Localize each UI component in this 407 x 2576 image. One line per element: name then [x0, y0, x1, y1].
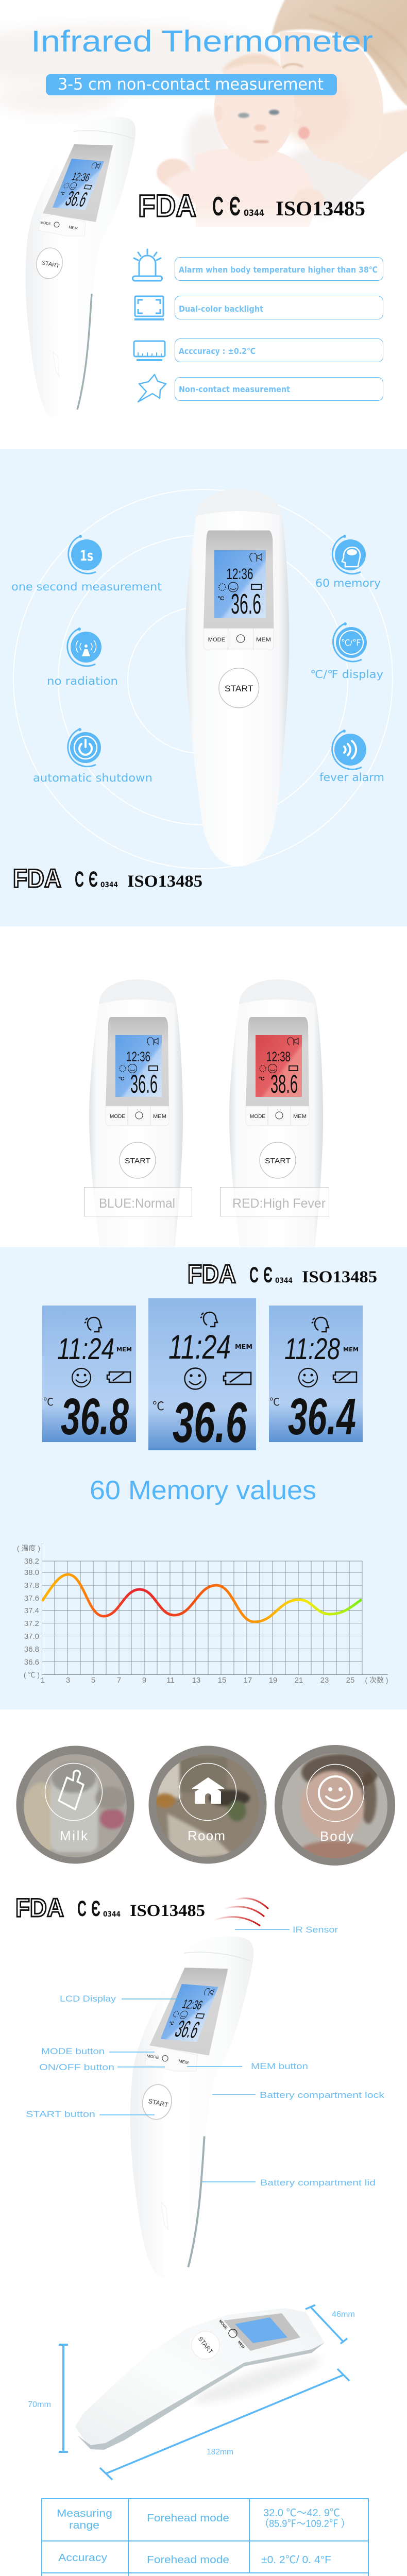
icon: brain in head	[332, 535, 366, 574]
callout: LCD display: LCD Display	[60, 1994, 116, 2004]
front thermometer, large: °C	[218, 596, 224, 602]
label: blue normal: BLUE:Normal	[99, 1196, 175, 1211]
LCD panel 2: 36.6	[148, 1298, 256, 1454]
feature: one second measurement: one second measurement	[11, 581, 162, 593]
line chart: temperature readings: 11	[166, 1676, 175, 1685]
callout: battery compartment lock: Battery compartment lock	[260, 2090, 385, 2100]
row: measuring range: range	[69, 2520, 99, 2531]
feature row: accuracy: Acccuracy : ±0.2℃	[179, 346, 256, 356]
feature row: non-contact	[138, 375, 383, 402]
thermometer with dimensions	[75, 2308, 325, 2450]
icon: house	[192, 1778, 224, 1803]
thermometer: blue backlight: 12:36	[126, 1049, 150, 1064]
baby's head	[214, 53, 295, 161]
panel: hero background photo of mother and baby	[0, 0, 407, 227]
thermometer with part callouts: MEM	[178, 2058, 189, 2065]
certification logos: blue panel: C	[75, 867, 84, 892]
icon: infrared waves	[214, 1898, 268, 1926]
callout: battery compartment lid: Battery compartment lid	[260, 2178, 376, 2188]
feature: C/F display	[310, 622, 383, 681]
certification logos: hero	[138, 189, 365, 223]
row: measuring range: （85.9℉～109.2℉ ）	[260, 2518, 350, 2530]
certification logos: hero: ISO13485	[276, 197, 365, 220]
icon: alarm light	[133, 249, 162, 281]
hero thermometer, tilted: °C	[59, 191, 65, 196]
LCD panel 1: 36.8	[42, 1306, 136, 1446]
feature: automatic shutdown	[33, 728, 152, 784]
specification table	[42, 2499, 368, 2576]
callout: IR sensor: IR Sensor	[293, 1925, 338, 1935]
LCD panel 3: 36.4	[269, 1306, 363, 1446]
use case: room	[148, 1745, 267, 1864]
dimension: width 46mm	[306, 2305, 355, 2344]
baby's fist	[157, 159, 191, 187]
line chart: temperature readings: 7	[117, 1676, 121, 1685]
line chart: temperature readings: 21	[295, 1676, 303, 1685]
feature row: alarm	[133, 249, 383, 281]
certification logos: parts section: C	[77, 1896, 87, 1921]
mother's face	[280, 32, 383, 164]
feature: fever alarm: fever alarm	[319, 771, 384, 784]
line chart: temperature readings: 37.4	[24, 1606, 39, 1615]
hero thermometer, tilted	[26, 117, 135, 420]
feature: no radiation	[47, 628, 118, 687]
feature: one second measurement	[11, 535, 162, 593]
feature: automatic shutdown: automatic shutdown	[33, 772, 152, 784]
feature: 60 memory	[315, 535, 381, 589]
LCD panel 3: 36.4: ℃	[269, 1397, 280, 1408]
label: blue normal	[84, 1187, 192, 1216]
use case: body	[275, 1745, 395, 1866]
thermometer with part callouts: 12:36	[180, 1997, 205, 2013]
title: Infrared Thermometer	[31, 25, 373, 58]
line chart: temperature readings: 37.0	[24, 1632, 39, 1641]
LCD panel 3: 36.4: MEM	[343, 1346, 359, 1353]
line chart: temperature readings: 37.6	[24, 1594, 39, 1603]
certification logos: memory panel: ISO13485	[302, 1268, 377, 1286]
front thermometer, large: MEM	[256, 637, 271, 643]
hero thermometer, tilted: 12:36	[70, 171, 92, 184]
front thermometer, large	[185, 489, 289, 867]
thermometer: blue backlight: MEM	[153, 1114, 166, 1120]
line chart: temperature readings: 36.6	[24, 1658, 39, 1667]
thermometer: blue backlight	[89, 979, 183, 1323]
feature row: accuracy	[134, 339, 383, 362]
line chart: temperature readings: 5	[91, 1676, 95, 1685]
line chart: temperature readings: 13	[192, 1676, 200, 1685]
line chart: temperature readings: 25	[346, 1676, 354, 1685]
row: accuracy: ±0. 2℃/ 0. 4°F	[261, 2554, 331, 2566]
LCD panel 2: 36.6: ℃	[152, 1399, 164, 1413]
feature: C/F display: ℃/℉ display	[310, 668, 383, 681]
thermometer: red backlight: MODE	[250, 1114, 265, 1120]
dimension: height 70mm: 70mm	[28, 2400, 51, 2409]
certification logos: parts section: 0344	[103, 1910, 121, 1919]
dimension: width 46mm: 46mm	[332, 2310, 355, 2319]
front thermometer, large: 12:36	[226, 566, 253, 583]
callout: MEM button: MEM button	[251, 2061, 308, 2071]
panel: features on blue background	[0, 449, 407, 926]
icon: ruler	[134, 341, 165, 360]
LCD panel 1: 36.8: ℃	[43, 1397, 54, 1408]
thermometer: red backlight: 12:38	[266, 1049, 291, 1064]
subtitle pill: 3-5 cm non-contact measurement	[58, 75, 324, 94]
hero thermometer, tilted: START	[41, 260, 60, 269]
icon: unit switch	[333, 622, 367, 662]
LCD panel 3: 36.4: 36.4	[288, 1388, 356, 1446]
row: measuring range: Forehead mode	[147, 2513, 229, 2524]
baby's body	[196, 148, 317, 227]
row: measuring range	[57, 2507, 350, 2531]
certification logos: memory panel: Є	[263, 1263, 273, 1287]
row: accuracy: Forehead mode	[147, 2554, 229, 2566]
line chart: temperature readings: ( 温度 )	[17, 1544, 40, 1552]
callout: ON/OFF button: ON/OFF button	[39, 2062, 114, 2072]
feature row: backlight: Dual-color backlight	[179, 304, 263, 314]
certification logos: parts section: Є	[91, 1896, 100, 1921]
certification logos: parts section: FDA	[15, 1893, 64, 1922]
front thermometer, large: MODE	[208, 637, 225, 643]
line chart: temperature readings: 19	[269, 1676, 277, 1685]
certification logos: memory panel	[188, 1260, 377, 1289]
thermometer with part callouts: START	[148, 2097, 169, 2109]
thermometer: blue backlight: 36.6	[130, 1070, 158, 1098]
callout: START button: START button	[26, 2109, 95, 2119]
mother's white shirt	[337, 151, 407, 215]
thermometer: blue backlight: MODE	[110, 1114, 125, 1120]
row: accuracy: Accuracy	[58, 2552, 107, 2564]
callout: MODE button: MODE button	[41, 2046, 105, 2056]
feature row: alarm: Alarm when body temperature higher than 38℃	[179, 265, 378, 275]
LCD panel 3: 36.4: 11:28	[284, 1332, 340, 1366]
line chart: temperature readings: 36.8	[24, 1645, 39, 1654]
feature row: backlight	[134, 296, 383, 319]
line chart: temperature readings: 3	[66, 1676, 70, 1685]
use case: room: Room	[188, 1828, 225, 1843]
icon: 1s: 1s	[80, 547, 93, 564]
use case: milk: Milk	[60, 1828, 88, 1843]
feature: 60 memory: 60 memory	[315, 577, 381, 589]
LCD panel 1: 36.8: 36.8	[61, 1388, 129, 1446]
LCD panel 2: 36.6: MEM	[235, 1343, 252, 1350]
line chart: temperature readings	[17, 1543, 388, 1685]
certification logos: blue panel: Є	[89, 867, 98, 892]
thermometer: red backlight: MEM	[293, 1114, 307, 1120]
certification logos: hero: 0344	[244, 208, 264, 218]
certification logos: memory panel: 0344	[275, 1277, 293, 1285]
line chart: temperature readings: 38.0	[24, 1568, 39, 1577]
thermometer with part callouts: 36.6	[172, 2016, 203, 2043]
use case: milk	[16, 1745, 134, 1864]
icon: unit switch: ℃/℉	[342, 639, 361, 648]
certification logos: memory panel: FDA	[188, 1260, 236, 1289]
row: accuracy	[58, 2552, 331, 2566]
icon: power	[68, 728, 101, 767]
feature: no radiation: no radiation	[47, 675, 118, 687]
panel: memory values background	[0, 1247, 407, 1709]
line chart: temperature readings: 38.2	[24, 1557, 39, 1566]
icon: smiley	[319, 1776, 352, 1809]
feature: fever alarm	[319, 730, 384, 784]
icon: 1s	[69, 535, 102, 573]
icon: push pin	[138, 375, 166, 402]
thermometer: red backlight: START	[265, 1157, 291, 1165]
line chart: temperature readings: ( 次数 )	[365, 1676, 388, 1684]
certification logos: hero: FDA	[138, 189, 196, 223]
thermometer: blue backlight: START	[125, 1157, 150, 1165]
thermometer with part callouts	[130, 1937, 253, 2279]
line chart: temperature readings: 37.2	[24, 1619, 39, 1628]
icon: antenna	[67, 628, 101, 666]
hero thermometer, tilted: MODE	[40, 221, 52, 226]
certification logos: hero: Є	[229, 192, 241, 222]
LCD panel 1: 36.8: 11:24	[57, 1332, 114, 1366]
icon: screen	[134, 296, 164, 319]
icon: sound waves	[332, 730, 366, 769]
thermometer: red backlight	[229, 979, 323, 1323]
LCD panel 2: 36.6: 11:24	[168, 1328, 231, 1366]
line chart: temperature readings: 9	[142, 1676, 146, 1685]
certification logos: blue panel: 0344	[100, 881, 118, 889]
thermometer: red backlight: 38.6	[270, 1070, 298, 1098]
certification logos: blue panel: FDA	[13, 864, 61, 893]
certification logos: parts section	[15, 1893, 205, 1922]
line chart: temperature readings: 23	[320, 1676, 329, 1685]
dimension: length 182mm: 182mm	[207, 2448, 233, 2456]
line chart: temperature readings: 17	[244, 1676, 252, 1685]
heading: 60 memory values: 60 Memory values	[90, 1476, 316, 1505]
hero thermometer, tilted: 36.6	[62, 188, 90, 211]
certification logos: hero: C	[212, 192, 224, 222]
front thermometer, large: 36.6	[231, 588, 261, 620]
line chart: temperature readings: ( ℃ )	[24, 1671, 40, 1679]
thermometer: red backlight: °C	[259, 1076, 264, 1082]
certification logos: blue panel	[13, 864, 202, 893]
LCD panel 1: 36.8: MEM	[116, 1346, 132, 1353]
certification logos: parts section: ISO13485	[130, 1902, 205, 1920]
hero thermometer, tilted: MEM	[69, 225, 78, 231]
icon: baby bottle	[59, 1771, 83, 1809]
front thermometer, large: START	[225, 684, 253, 693]
row: measuring range: 32.0 ℃～42. 9℃	[263, 2507, 340, 2519]
use case: body: Body	[320, 1828, 353, 1844]
thermometer with dimensions: START	[197, 2335, 215, 2355]
thermometer: blue backlight: °C	[118, 1076, 124, 1082]
line chart: temperature readings: 1	[41, 1676, 45, 1685]
mother's neck and shoulder	[340, 108, 407, 180]
certification logos: blue panel: ISO13485	[127, 872, 202, 891]
feature row: non-contact: Non-contact measurement	[179, 384, 290, 394]
label: red high fever: RED:High Fever	[232, 1196, 326, 1211]
line chart: temperature readings: 37.8	[24, 1581, 39, 1590]
dimension: length 182mm	[100, 2369, 349, 2480]
thermometer with part callouts: °C	[168, 2020, 175, 2026]
thermometer with part callouts: MODE	[146, 2054, 159, 2060]
dimension: height 70mm	[28, 2345, 68, 2452]
row: measuring range: Measuring	[57, 2508, 112, 2519]
certification logos: memory panel: C	[249, 1263, 259, 1287]
thermometer with dimensions: MODE	[218, 2319, 228, 2330]
label: red high fever	[221, 1187, 329, 1216]
LCD panel 2: 36.6: 36.6	[173, 1391, 247, 1454]
line chart: temperature readings: 15	[218, 1676, 226, 1685]
thermometer with dimensions: MEM	[237, 2341, 245, 2349]
mother's hair	[272, 0, 407, 109]
